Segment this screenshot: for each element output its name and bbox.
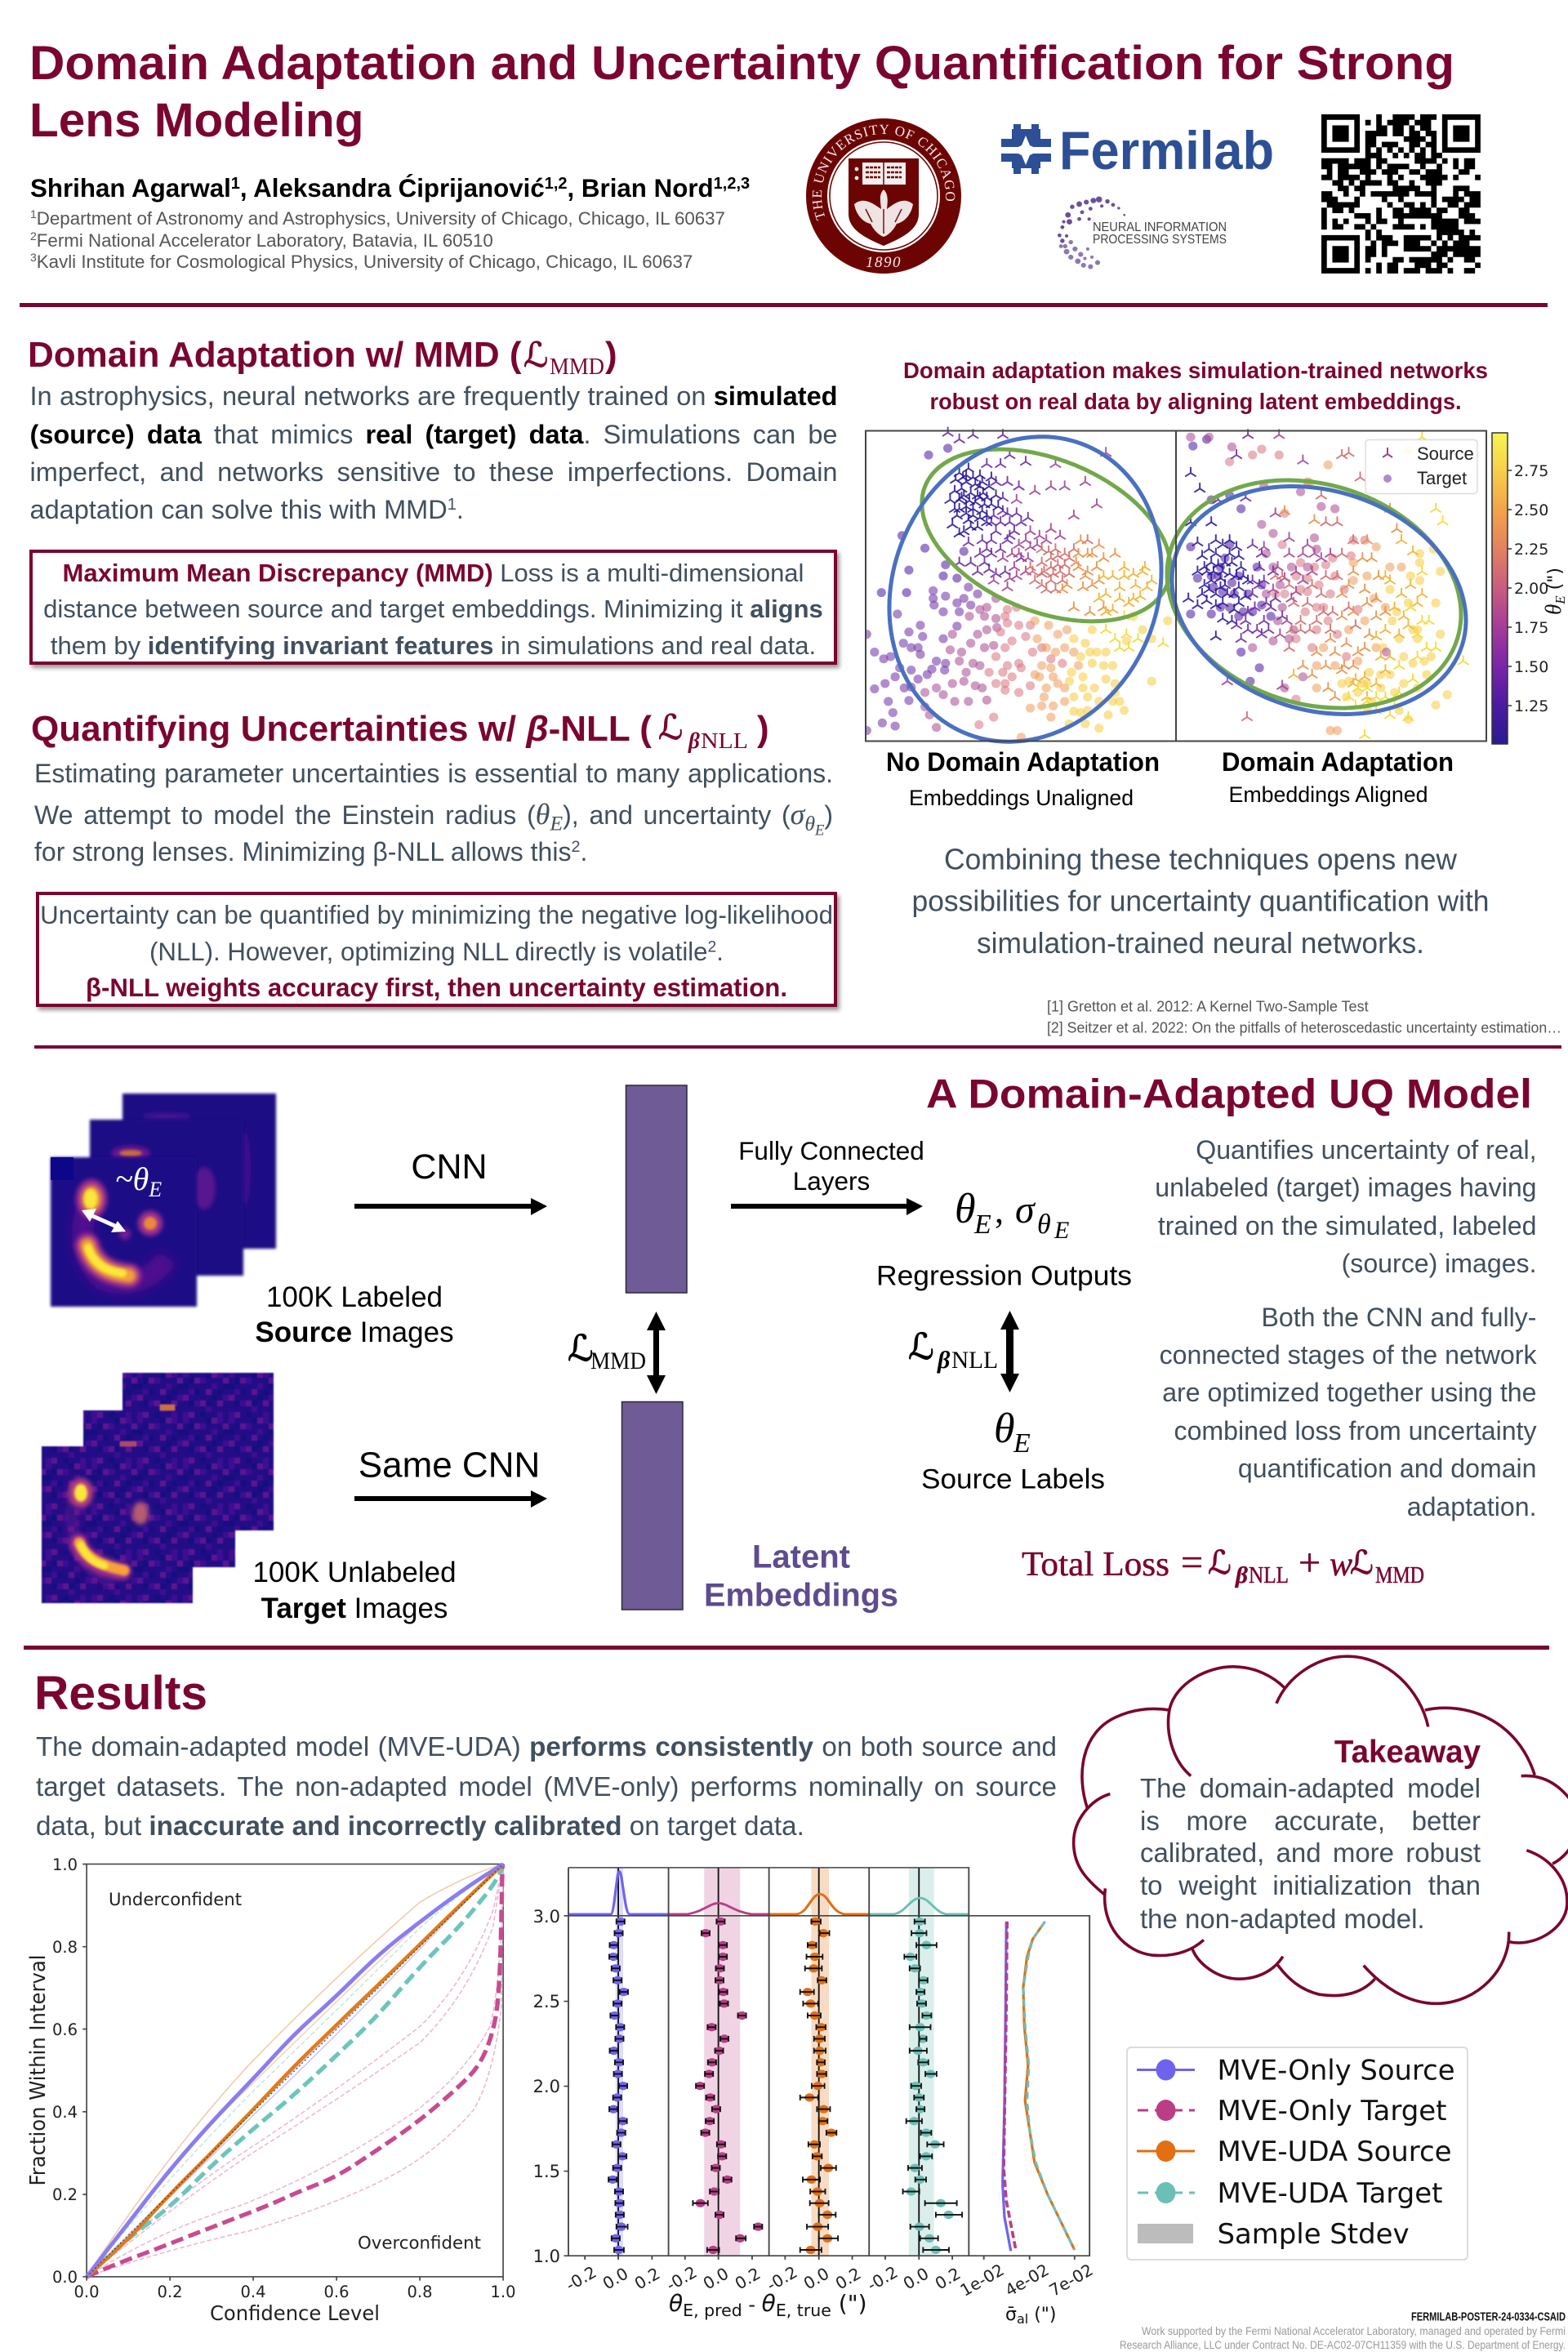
- image stack: target lenses: [42, 1373, 274, 1603]
- summary statement: possibilities for uncertainty quantification with: [911, 884, 1490, 918]
- label: source images: Source Images: [255, 1316, 454, 1348]
- x axis tick labels: 0.2: [732, 2264, 764, 2293]
- text: uncertainty paragraph: [34, 759, 833, 866]
- latent block: target: [622, 1401, 683, 1610]
- x axis tick labels: 0.0: [599, 2264, 631, 2293]
- label: theta E source: θ: [994, 1405, 1015, 1452]
- heading: Quantifying Uncertainties w/ beta-NLL: ℒ: [658, 707, 683, 747]
- text: model description: connected stages of the network: [1160, 1340, 1537, 1370]
- affiliations: 2: [30, 229, 37, 243]
- callout: beta-NLL definition: [36, 892, 837, 1007]
- affiliations: [30, 207, 725, 272]
- label: regression output symbols: ,: [995, 1191, 1004, 1231]
- text: model description: [1155, 1135, 1537, 1521]
- text: domain adaptation paragraph: imperfect, and networks sensitive to these imperfections. Domain: [29, 457, 838, 487]
- y axis tick labels: 1.5: [533, 2162, 560, 2181]
- x axis tick labels: 0.0: [700, 2264, 732, 2293]
- colorbar: 1.50: [1514, 658, 1548, 676]
- label: fully connected layers: Fully Connected: [738, 1136, 924, 1165]
- x axis tick labels: 0.0: [800, 2264, 832, 2293]
- chart: residual panels: [533, 1868, 1096, 2327]
- right panel source points: [1188, 434, 1463, 735]
- heading: Domain Adaptation w/ MMD: Domain Adaptation w/ MMD (: [28, 335, 522, 375]
- ellipse: left source cluster (green): [897, 416, 1196, 655]
- x axis title: residual: E, true: [776, 2301, 831, 2320]
- label: L beta NLL: ℒ: [908, 1326, 934, 1368]
- axis titles: Fraction Within Interval: [26, 1955, 51, 2185]
- summary statement: Combining these techniques opens new: [944, 843, 1458, 875]
- text: model description: quantification and domain: [1238, 1454, 1537, 1483]
- callout: MMD definition: them by identifying invariant features in simulations and real data.: [51, 631, 816, 660]
- arrow: fully connected: [731, 1198, 923, 1215]
- marginal distributions: [568, 1872, 969, 1914]
- residual points: MVE-UDA source: [800, 1922, 838, 2250]
- text: takeaway body: calibrated, and more robust: [1140, 1838, 1481, 1868]
- ellipse: right source cluster (green): [1138, 445, 1490, 743]
- label: source images: 100K Labeled: [266, 1281, 443, 1313]
- x axis tick labels: 7e-02: [1046, 2260, 1096, 2301]
- equation: total loss: Total Loss: [1022, 1546, 1169, 1584]
- x axis tick labels: -0.2: [764, 2262, 800, 2295]
- panel labels under scatter: Domain Adaptation: [1222, 747, 1454, 777]
- text: model description: adaptation.: [1407, 1492, 1537, 1521]
- text: domain adaptation paragraph: In astrophysics, neural networks are frequently trained on simulated: [29, 381, 838, 411]
- x axis tick labels: -0.2: [663, 2262, 700, 2295]
- logo: Neural Information Processing Systems: NEURAL INFORMATION: [1093, 220, 1227, 234]
- x axis title: residual: ("): [831, 2290, 867, 2317]
- x axis title: residual: [669, 2290, 867, 2320]
- label: latent embeddings: [704, 1539, 898, 1614]
- callout heading: domain adaptation statement: Domain adaptation makes simulation-trained networks: [903, 358, 1488, 383]
- heading: Domain Adaptation w/ MMD: MMD: [550, 354, 604, 380]
- label: theta E source: E: [1013, 1428, 1031, 1459]
- heading: Domain Adaptation w/ MMD: ): [605, 335, 617, 375]
- authors: 1,2,3: [714, 175, 750, 193]
- heading: Quantifying Uncertainties w/ beta-NLL: ): [757, 709, 769, 749]
- equation: total loss: =: [1181, 1541, 1203, 1584]
- affiliations: Department of Astronomy and Astrophysics, University of Chicago, Chicago, IL 60637: [37, 208, 725, 229]
- legend: MVE-only source: MVE-Only Source: [1217, 2055, 1455, 2087]
- references: [2] Seitzer et al. 2022: On the pitfalls of heteroscedastic uncertainty estimation…: [1047, 1020, 1561, 1036]
- label: target images: Target Images: [261, 1592, 448, 1624]
- equation: total loss: β: [1235, 1562, 1248, 1588]
- x axis tick labels: -0.2: [864, 2262, 901, 2295]
- title: [29, 37, 1454, 147]
- residual points: MVE-only source: [608, 1922, 628, 2250]
- text: domain adaptation paragraph: [29, 381, 838, 524]
- chart: latent embedding scatter panels: [865, 426, 1565, 745]
- x axis title: sigma: ("): [1028, 2305, 1056, 2325]
- heading: Domain Adaptation w/ MMD: ℒ: [523, 335, 548, 375]
- callout: MMD definition: distance between source and target embeddings. Minimizing it aligns: [43, 595, 823, 623]
- image stack: source lenses: [51, 1094, 276, 1307]
- text: uncertainty paragraph: for strong lenses. Minimizing β-NLL allows this2.: [34, 837, 587, 866]
- colorbar: 2.00: [1514, 580, 1548, 598]
- affiliations: 3: [30, 251, 37, 264]
- x axis tick labels: 0.0: [74, 2283, 100, 2301]
- axis titles: Confidence Level: [210, 2301, 380, 2325]
- y axis tick labels: 0.4: [52, 2103, 78, 2122]
- annotations: [109, 1890, 481, 2252]
- x axis tick labels: 4e-02: [1002, 2260, 1052, 2301]
- annotation: theta E arrow: ~θ: [115, 1160, 149, 1197]
- icon: Fermilab mark: [1001, 124, 1051, 174]
- ellipse: left target cluster (blue): [843, 394, 1208, 785]
- label: CNN: CNN: [411, 1147, 488, 1187]
- arrow: CNN: [354, 1198, 547, 1215]
- colorbar: 2.50: [1514, 501, 1548, 519]
- text: model description: are optimized together using the: [1162, 1378, 1537, 1407]
- scatter legend: [1365, 439, 1477, 493]
- panel labels under scatter: [886, 747, 1454, 810]
- callout: MMD definition: [29, 550, 837, 665]
- logo: University of Chicago seal: THE UNIVERSITY OF CHICAGO: [812, 124, 956, 220]
- authors: 1,2: [545, 175, 568, 193]
- aleatoric sigma curves: [1003, 1922, 1075, 2251]
- x axis tick labels: 0.2: [157, 2283, 183, 2301]
- summary statement: [911, 843, 1490, 960]
- x axis tick labels: [74, 2283, 516, 2301]
- annotation: theta E arrow: [82, 1160, 162, 1232]
- callout heading: domain adaptation statement: [903, 358, 1488, 414]
- y axis tick labels: 0.8: [52, 1938, 78, 1957]
- heading: A Domain-Adapted UQ Model: A Domain-Adapted UQ Model: [926, 1070, 1532, 1117]
- callout: beta-NLL definition: Uncertainty can be quantified by minimizing the negative log-likelihood: [40, 901, 833, 929]
- y axis tick labels: 0.2: [52, 2185, 78, 2204]
- authors: Shrihan Agarwal: [30, 174, 231, 203]
- text: takeaway body: the non-adapted model.: [1140, 1904, 1425, 1934]
- scatter legend: Source: [1417, 443, 1474, 464]
- colorbar: ("): [1545, 568, 1566, 595]
- x axis title: residual: E, pred: [683, 2301, 742, 2320]
- y axis tick labels: 1.0: [533, 2247, 560, 2266]
- label: latent embeddings: Embeddings: [704, 1578, 898, 1614]
- x axis tick labels: 0.6: [323, 2283, 350, 2301]
- scatter legend: Target: [1417, 468, 1467, 488]
- left panel target points: [866, 448, 1168, 737]
- equation: total loss: NLL: [1249, 1562, 1289, 1588]
- footer: [1120, 2310, 1566, 2351]
- arrow: NLL double: [1000, 1311, 1019, 1392]
- text: model description: Both the CNN and fully-: [1262, 1303, 1537, 1332]
- colorbar: 1.75: [1514, 619, 1548, 637]
- y axis tick labels: 0.0: [52, 2268, 78, 2287]
- label: L beta NLL: NLL: [951, 1347, 998, 1374]
- authors: , Brian Nord: [568, 174, 714, 203]
- x axis tick labels: 0.0: [900, 2264, 932, 2293]
- label: fully connected layers: Layers: [793, 1166, 870, 1196]
- curve: MVE-UDA source: [87, 1864, 503, 2277]
- y axis tick labels: 2.0: [533, 2077, 560, 2096]
- text: takeaway body: is more accurate, better: [1140, 1806, 1481, 1836]
- authors: , Aleksandra Ćiprijanović: [240, 173, 545, 203]
- logo: University of Chicago seal: 1890: [866, 254, 902, 271]
- heading: Results: Results: [34, 1667, 207, 1720]
- latent block: source: [626, 1085, 687, 1293]
- curve: MVE-only target: [87, 1864, 502, 2277]
- x axis title: residual: -: [742, 2293, 762, 2316]
- x axis title: sigma: al: [1017, 2311, 1028, 2327]
- x axis tick labels: 0.2: [832, 2264, 864, 2293]
- x axis tick labels: 0.2: [932, 2264, 964, 2293]
- label: L beta NLL: β: [937, 1347, 951, 1374]
- label: L MMD: [568, 1328, 646, 1374]
- references: [1] Gretton et al. 2012: A Kernel Two-Sample Test: [1047, 998, 1369, 1014]
- annotations: Underconfident: [109, 1890, 242, 1909]
- heading: Quantifying Uncertainties w/ beta-NLL: β: [688, 728, 700, 753]
- x axis title: residual: θ: [669, 2290, 683, 2317]
- label: theta E source: [994, 1405, 1031, 1459]
- colorbar: [1492, 433, 1568, 744]
- colorbar: 1.25: [1514, 697, 1548, 715]
- label: Same CNN: Same CNN: [359, 1446, 540, 1485]
- text: model description: trained on the simulated, labeled: [1158, 1211, 1537, 1241]
- text: results paragraph: [36, 1732, 1057, 1842]
- x axis title: sigma: σ̄: [1005, 2305, 1017, 2325]
- legend: MVE-only target: MVE-Only Target: [1217, 2095, 1447, 2127]
- arrow: Same CNN: [354, 1490, 547, 1508]
- title: Lens Modeling: [29, 94, 364, 147]
- callout: MMD definition: Maximum Mean Discrepancy (MMD) Loss is a multi-dimensional: [63, 559, 804, 587]
- curve: MVE-UDA target: [87, 1864, 503, 2277]
- equation: total loss: ℒ: [1350, 1544, 1374, 1582]
- x axis tick labels: 0.4: [240, 2283, 266, 2301]
- authors: 1: [231, 175, 240, 193]
- logo: Neural Information Processing Systems: [1058, 197, 1227, 269]
- left panel source points: [948, 433, 1163, 648]
- ellipse: right target cluster (blue): [1143, 451, 1494, 750]
- y axis tick labels: 2.5: [533, 1992, 560, 2011]
- text: model description: unlabeled (target) images having: [1155, 1173, 1537, 1202]
- residual points: MVE-only target: [693, 1922, 762, 2250]
- label: target images: 100K Unlabeled: [252, 1557, 457, 1588]
- logo: Fermilab: Fermilab: [1059, 120, 1274, 180]
- legend: sample stdev: Sample Stdev: [1217, 2218, 1410, 2251]
- affiliations: Fermi National Accelerator Laboratory, Batavia, IL 60510: [37, 230, 493, 251]
- x axis tick labels: 0.2: [631, 2264, 663, 2293]
- takeaway heading: Takeaway: [1334, 1735, 1481, 1770]
- panel labels under scatter: Embeddings Unaligned: [909, 786, 1134, 810]
- text: results paragraph: data, but inaccurate and incorrectly calibrated on target data.: [36, 1811, 804, 1842]
- colorbar: θ: [1541, 604, 1566, 615]
- label: source images: [255, 1281, 454, 1348]
- logo: University of Chicago seal: [806, 118, 961, 274]
- label: regression output symbols: σ: [1015, 1188, 1036, 1232]
- x axis tick labels: 1e-02: [957, 2260, 1007, 2301]
- colorbar: 2.75: [1514, 462, 1548, 480]
- title: Domain Adaptation and Uncertainty Quantification for Strong: [29, 37, 1454, 90]
- equation: total loss: MMD: [1375, 1562, 1424, 1588]
- text: results paragraph: The domain-adapted model (MVE-UDA) performs consistently on both source and: [36, 1732, 1057, 1762]
- label: source labels: Source Labels: [921, 1464, 1105, 1495]
- sample stdev bands: [616, 1868, 934, 2256]
- label: regression output symbols: θ: [955, 1186, 976, 1232]
- label: latent embeddings: Latent: [752, 1539, 850, 1575]
- text: model description: combined loss from uncertainty: [1174, 1416, 1537, 1446]
- panel labels under scatter: No Domain Adaptation: [886, 747, 1160, 777]
- references: [1047, 998, 1561, 1036]
- heading: Quantifying Uncertainties w/ beta-NLL: Quantifying Uncertainties w/ β-NLL (: [31, 709, 652, 749]
- panel labels under scatter: Embeddings Aligned: [1228, 782, 1428, 807]
- label: regression output symbols: θ: [1037, 1209, 1051, 1240]
- y axis tick labels: 3.0: [533, 1907, 560, 1927]
- QR code: [1321, 117, 1481, 271]
- label: target images: [252, 1557, 457, 1624]
- label: regression output symbols: [955, 1186, 1069, 1244]
- label: fully connected layers: [738, 1136, 924, 1196]
- label: L MMD: ℒ: [568, 1328, 594, 1370]
- summary statement: simulation-trained neural networks.: [977, 926, 1424, 960]
- callout heading: domain adaptation statement: robust on real data by aligning latent embeddings.: [929, 389, 1462, 414]
- legend: [1127, 2047, 1468, 2260]
- text: results paragraph: target datasets. The non-adapted model (MVE-only) performs nominally on source: [36, 1772, 1057, 1802]
- y axis tick labels: [533, 1907, 560, 2266]
- takeaway cloud: [1074, 1656, 1568, 2003]
- colorbar: 2.25: [1514, 541, 1548, 559]
- logo: Neural Information Processing Systems: PROCESSING SYSTEMS: [1093, 233, 1227, 247]
- legend: MVE-UDA source: MVE-UDA Source: [1217, 2136, 1452, 2168]
- right panel target points: [1191, 437, 1447, 731]
- x axis tick labels: 1.0: [490, 2283, 516, 2301]
- label: L beta NLL: [908, 1326, 998, 1374]
- y axis tick labels: 1.0: [52, 1855, 78, 1874]
- axis titles: [26, 1955, 380, 2325]
- text: domain adaptation paragraph: adaptation can solve this with MMD1.: [29, 495, 464, 524]
- annotations: Overconfident: [358, 2233, 481, 2252]
- heading: Quantifying Uncertainties w/ beta-NLL: NLL: [701, 728, 748, 753]
- equation: total loss: [1022, 1541, 1424, 1588]
- icon: neurips dot arc: [1058, 197, 1125, 269]
- residual points: MVE-UDA target: [903, 1922, 962, 2250]
- text: uncertainty paragraph: Estimating parameter uncertainties is essential to many applications.: [34, 759, 833, 788]
- callout: beta-NLL definition: (NLL). However, optimizing NLL directly is volatile2.: [149, 938, 724, 966]
- equation: total loss: ℒ: [1208, 1544, 1232, 1582]
- equation: total loss: w: [1330, 1546, 1352, 1584]
- equation: total loss: +: [1298, 1541, 1321, 1584]
- text: takeaway body: [1140, 1773, 1481, 1934]
- chart: calibration curves: [26, 1855, 516, 2325]
- text: model description: (source) images.: [1342, 1249, 1537, 1278]
- y axis tick labels: [52, 1855, 78, 2287]
- label: regression output symbols: E: [973, 1209, 991, 1240]
- text: takeaway body: The domain-adapted model: [1140, 1773, 1481, 1803]
- x axis title: residual: θ: [762, 2290, 776, 2317]
- annotation: theta E arrow: E: [148, 1178, 162, 1201]
- text: takeaway body: to weight initialization than: [1140, 1870, 1481, 1900]
- colorbar: E: [1552, 595, 1568, 605]
- x axis tick labels: [563, 2260, 1096, 2301]
- x axis tick labels: 0.8: [407, 2283, 433, 2301]
- affiliations: Kavli Institute for Cosmological Physics, University of Chicago, Chicago, IL 60637: [37, 252, 693, 272]
- text: model description: Quantifies uncertainty of real,: [1196, 1135, 1537, 1165]
- arrow: MMD double: [647, 1312, 666, 1394]
- affiliations: 1: [30, 207, 37, 220]
- legend: MVE-UDA target: MVE-UDA Target: [1217, 2177, 1442, 2210]
- x axis tick labels: -0.2: [563, 2262, 599, 2295]
- y axis tick labels: 0.6: [52, 2020, 78, 2039]
- label: regression output symbols: E: [1054, 1217, 1069, 1244]
- label: L MMD: MMD: [590, 1348, 646, 1374]
- text: domain adaptation paragraph: (source) data that mimics real (target) data. Simulations can be: [29, 420, 838, 449]
- curve: MVE-only source: [87, 1864, 503, 2277]
- text: uncertainty paragraph: We attempt to model the Einstein radius (θE), and uncertainty (σθE): [34, 798, 833, 839]
- label: regression outputs: Regression Outputs: [876, 1261, 1132, 1292]
- callout: beta-NLL definition: β-NLL weights accuracy first, then uncertainty estimation.: [86, 973, 787, 1002]
